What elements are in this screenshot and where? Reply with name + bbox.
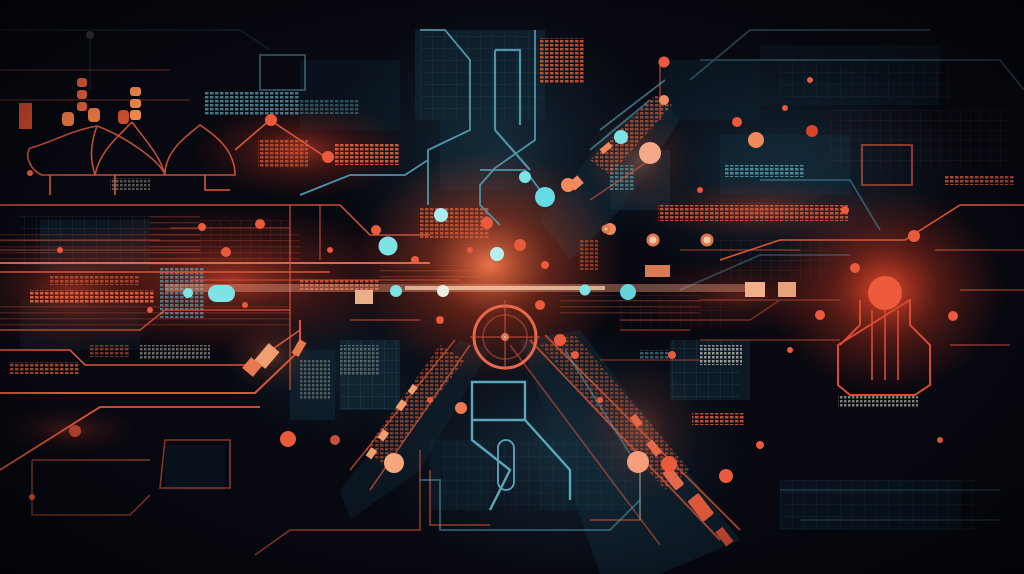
cyan nodes — [183, 130, 636, 302]
ring nodes — [502, 226, 712, 340]
hatched data panels — [10, 38, 1015, 490]
orange nodes — [27, 31, 958, 500]
diagonal strip blocks — [242, 142, 796, 547]
soft light beam — [165, 284, 745, 292]
blue glow areas — [210, 0, 970, 574]
left lamp icons — [19, 78, 141, 129]
red and orange glows — [0, 100, 1005, 500]
